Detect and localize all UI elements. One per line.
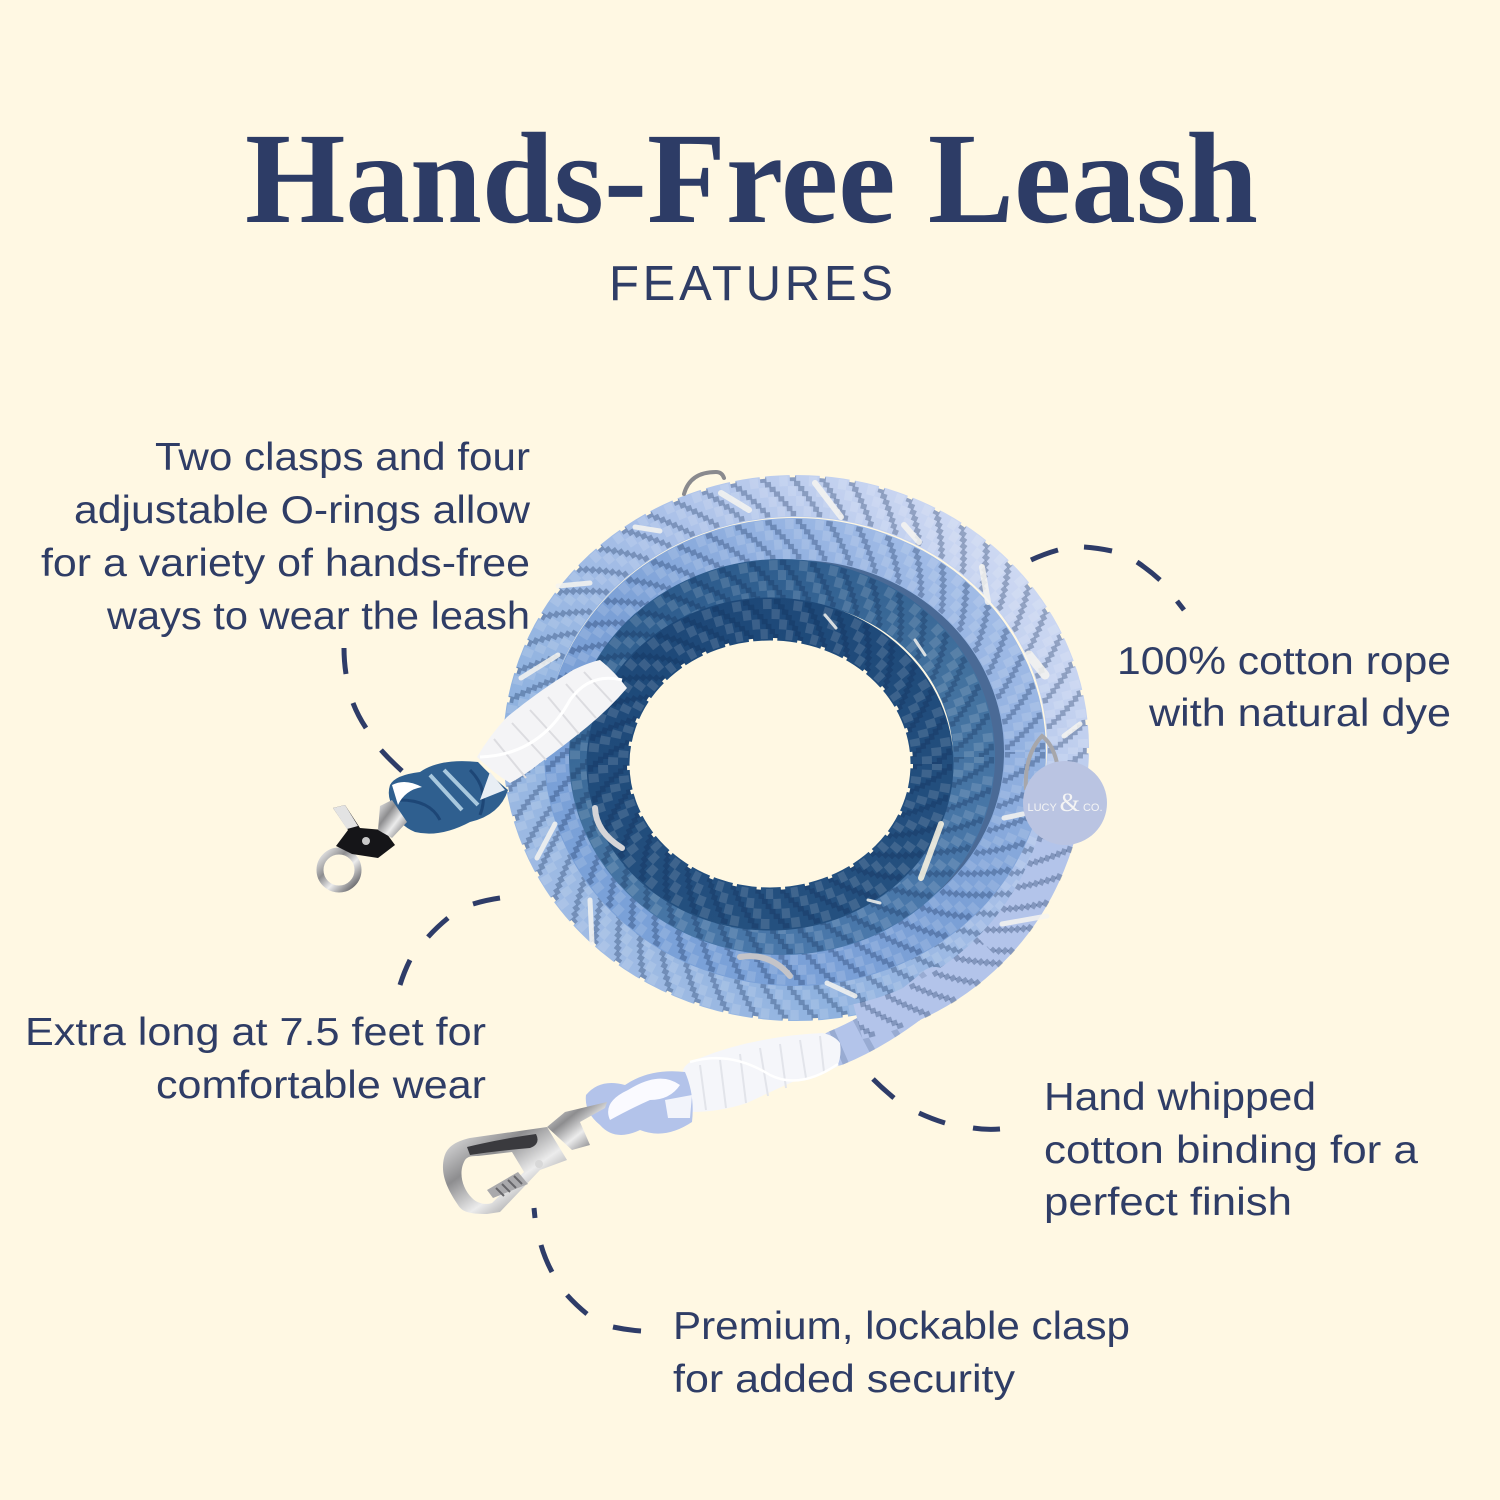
dashed arrow: extra long xyxy=(400,898,500,985)
tail end strand xyxy=(836,985,935,1048)
outer coil xyxy=(504,476,1088,1020)
brand tag xyxy=(1023,736,1107,845)
callout text: clasps and O-rings: ways to wear the leash xyxy=(106,595,530,638)
callout text: extra long: comfortable wear xyxy=(156,1064,486,1107)
callout text: hand whipped binding: perfect finish xyxy=(1044,1181,1292,1224)
callout text: lockable clasp xyxy=(673,1305,1130,1401)
callout text: hand whipped binding: cotton binding for a xyxy=(1044,1129,1418,1172)
callout text: lockable clasp: Premium, lockable clasp xyxy=(673,1305,1130,1348)
white dye streaks xyxy=(521,483,1080,996)
small snap clasp xyxy=(320,800,407,889)
tag logo text: LUCY & CO. xyxy=(1027,788,1103,817)
second coil xyxy=(572,562,992,952)
dashed arrow: lockable clasp xyxy=(534,1208,641,1331)
lockable carabiner clasp xyxy=(443,1102,607,1214)
inner coil xyxy=(590,602,950,926)
callout text: extra long xyxy=(25,1011,486,1107)
dashed arrow: cotton rope xyxy=(1031,547,1184,610)
callout text: clasps and O-rings xyxy=(41,436,531,638)
whipped binding: lower xyxy=(683,1033,841,1112)
callout text: clasps and O-rings: adjustable O-rings allow xyxy=(74,489,531,532)
whipped binding: upper xyxy=(477,660,627,783)
callout text: cotton rope: 100% cotton rope xyxy=(1117,640,1451,683)
tag disc xyxy=(1023,761,1107,845)
subtitle: FEATURES xyxy=(609,257,893,311)
O-ring: bottom xyxy=(740,956,790,976)
coil gap shadow xyxy=(582,565,998,945)
dashed arrow: clasps xyxy=(344,648,402,771)
rope knot: lower end xyxy=(586,1071,693,1135)
callout text: extra long: Extra long at 7.5 feet for xyxy=(25,1011,486,1054)
rope knot: upper end xyxy=(389,761,508,834)
callout text: clasps and O-rings: for a variety of hands-free xyxy=(41,542,530,585)
callout text: cotton rope xyxy=(1117,640,1451,735)
callout text: hand whipped binding: Hand whipped xyxy=(1044,1076,1316,1119)
dashed arrow: binding xyxy=(873,1079,1000,1129)
callout text: lockable clasp: for added security xyxy=(673,1358,1016,1401)
coiled rope leash xyxy=(504,475,1089,1066)
tag ring xyxy=(1026,736,1058,790)
O-ring: left xyxy=(595,808,622,848)
third coil xyxy=(548,522,1042,982)
callout text: clasps and O-rings: Two clasps and four xyxy=(155,436,530,479)
lower right tail strand xyxy=(854,836,1074,1039)
title: Hands-Free Leash xyxy=(245,107,1258,251)
O-ring: top xyxy=(684,472,724,494)
callout text: cotton rope: with natural dye xyxy=(1148,692,1451,735)
callout text: hand whipped binding xyxy=(1044,1076,1418,1224)
